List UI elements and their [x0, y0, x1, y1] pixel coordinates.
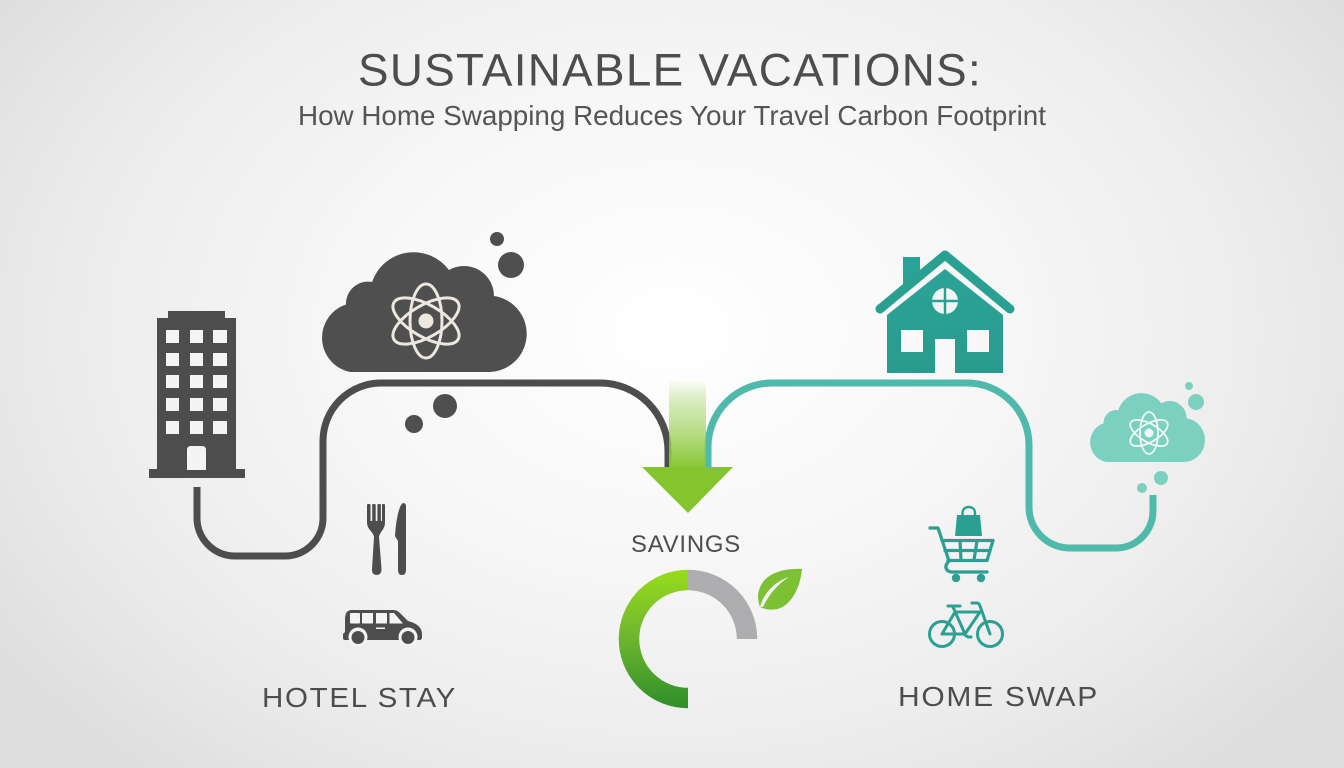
carbon bubbles: small cloud	[1137, 382, 1204, 493]
label: hotel stay: HOTEL STAY	[262, 682, 457, 713]
icon: house	[880, 255, 1010, 373]
icon: bicycle	[930, 603, 1002, 646]
home swap path	[708, 383, 1153, 548]
savings donut gauge	[629, 580, 747, 698]
label: home swap: HOME SWAP	[898, 681, 1099, 712]
icon: shopping cart with bag	[930, 507, 993, 582]
carbon bubbles: large cloud	[405, 232, 524, 433]
icon: leaf	[758, 569, 802, 610]
icon: fork and knife	[367, 503, 406, 575]
label: savings: SAVINGS	[631, 531, 741, 558]
icon: van	[343, 610, 422, 646]
subtitle: How Home Swapping Reduces Your Travel Carbon Footprint	[298, 100, 1046, 131]
hotel emissions path	[197, 383, 668, 556]
icon: large carbon cloud with atom	[322, 252, 527, 372]
arrow: savings down arrow	[642, 380, 733, 513]
icon: hotel building	[149, 311, 245, 478]
icon: small carbon cloud with atom	[1090, 393, 1205, 462]
title: SUSTAINABLE VACATIONS:	[358, 44, 982, 96]
